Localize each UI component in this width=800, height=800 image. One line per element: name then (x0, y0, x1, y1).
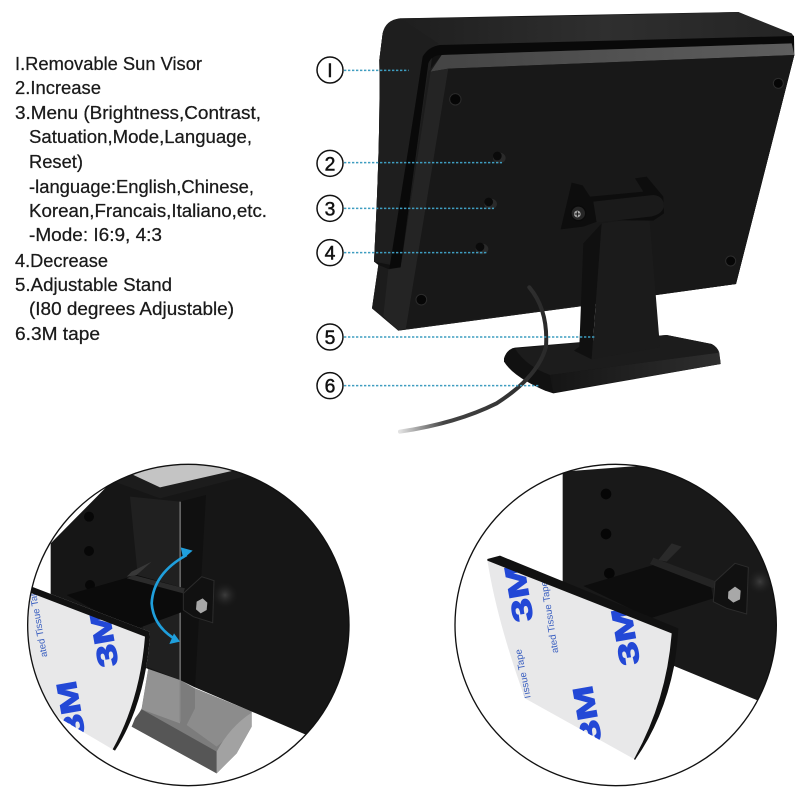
feature list text: -language:English,Chinese, (29, 176, 254, 197)
callout 2 (317, 150, 343, 176)
buttons 2 3 4 (476, 152, 506, 254)
tape plate: ated Tissue Tape (27, 584, 50, 658)
callout 5: 5 (325, 328, 335, 349)
bracket arm (67, 575, 185, 630)
feature list text: Korean,Francais,Italiano,etc. (29, 200, 267, 221)
feature list text: 2.Increase (15, 77, 101, 98)
detail circle: 3M tape mount (455, 460, 783, 786)
stand base (504, 335, 721, 393)
bolt bracket (183, 577, 214, 623)
feature list text: 3.Menu (Brightness,Contrast, (15, 102, 261, 123)
callout leader lines (344, 70, 595, 386)
feature list text: Satuation,Mode,Language, (29, 126, 252, 147)
stand neck (561, 177, 664, 359)
monitor rear view diagram (317, 12, 794, 432)
bracket arm (583, 565, 713, 618)
callout 3: 3 (325, 199, 335, 220)
base reflection (132, 668, 252, 773)
feature list text: (I80 degrees Adjustable) (29, 298, 234, 319)
callout 1: I (327, 61, 333, 82)
tape plate: 3M (567, 683, 608, 746)
callout 1 (317, 57, 343, 83)
buttons (84, 512, 94, 522)
detail circle: adjustable stand (20, 464, 353, 793)
tape plate: 3M (51, 678, 91, 739)
feature list text (15, 53, 267, 344)
callout 4: 4 (325, 244, 336, 265)
blue rotation arrow (152, 547, 193, 644)
tape plate: ated Tissue Tape (539, 580, 561, 654)
feature list text: -Mode: I6:9, 4:3 (29, 224, 162, 245)
tape plate: 3M (84, 608, 125, 669)
bolt bracket (713, 563, 748, 614)
tape plate (20, 583, 150, 751)
callout 4 (317, 240, 343, 266)
callout 6 (317, 373, 343, 399)
feature list text: Reset) (29, 151, 83, 172)
callout 3 (317, 195, 343, 221)
screw holes (416, 78, 783, 305)
feature list text: 5.Adjustable Stand (15, 274, 172, 295)
tape plate: 3M (605, 605, 646, 668)
monitor back (50, 476, 348, 734)
monitor silhouette backing (372, 12, 794, 331)
callout 2: 2 (325, 154, 335, 175)
buttons (601, 489, 611, 499)
monitor back (562, 466, 776, 700)
tape plate: Tissue Tape (513, 648, 534, 701)
callout 6: 6 (325, 377, 335, 398)
feature list text: 6.3M tape (15, 323, 100, 344)
feature list text: 4.Decrease (15, 250, 108, 271)
callout 5 (317, 324, 343, 350)
tape plate (487, 556, 678, 760)
tape plate: 3M (498, 561, 540, 624)
sun visor (374, 12, 794, 267)
display back panel (372, 43, 794, 331)
feature list text: I.Removable Sun Visor (15, 53, 202, 74)
cable (400, 287, 546, 432)
